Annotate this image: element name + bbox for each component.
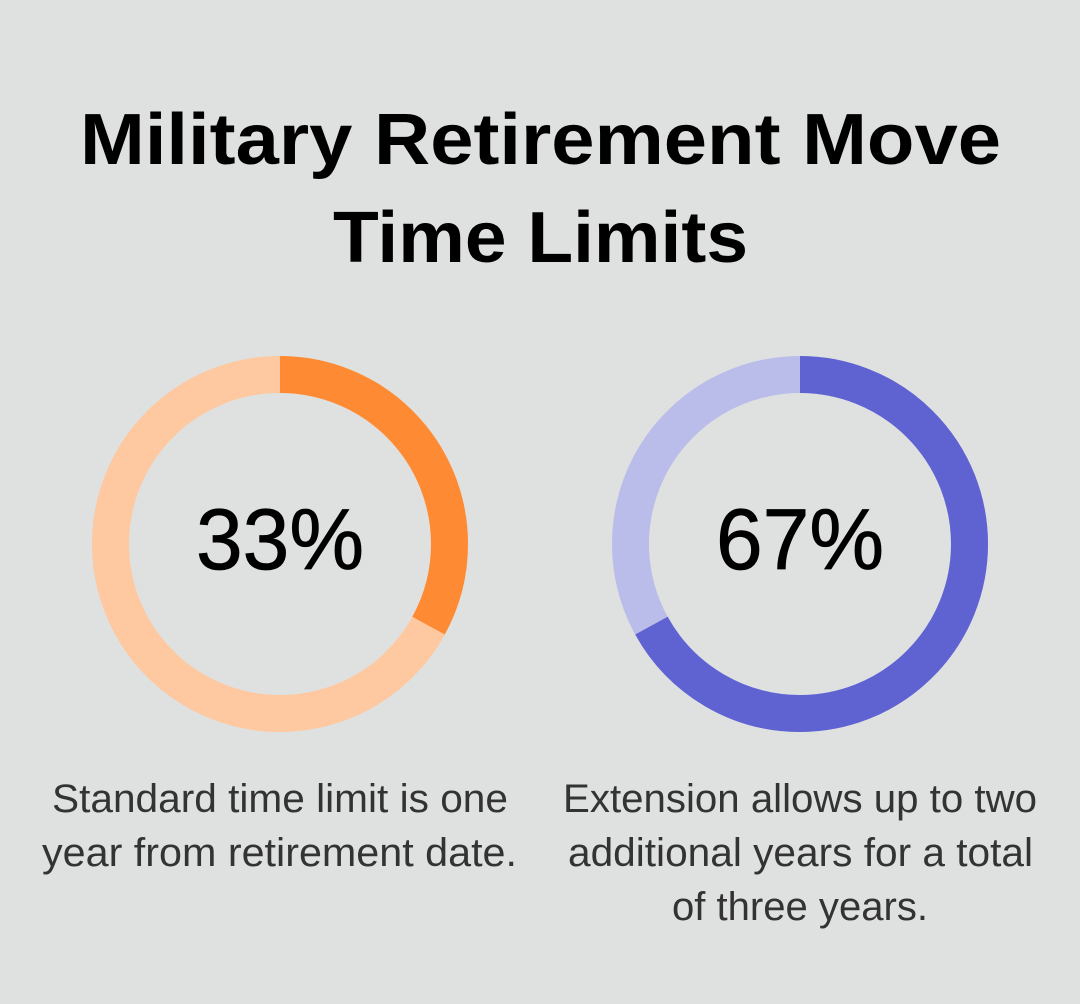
donut chart: 67%: [630, 374, 970, 714]
panel: standard time limit: [42, 374, 517, 875]
description: standard time limit: Standard time limit is one: [52, 777, 508, 821]
description: standard time limit: year from retirement date.: [42, 831, 517, 875]
description: extension: Extension allows up to two: [563, 777, 1037, 821]
description: extension: of three years.: [672, 885, 928, 929]
donut chart: 33%: [110, 374, 450, 714]
description: standard time limit: [42, 777, 517, 875]
title: Military Retirement Move: [80, 100, 1001, 180]
title: [80, 100, 1001, 278]
description: extension: additional years for a total: [568, 831, 1033, 875]
panel: extension: [563, 374, 1037, 929]
stat: 67%: 67%: [716, 492, 884, 588]
description: extension: [563, 777, 1037, 929]
title: Time Limits: [333, 198, 748, 278]
stat: 33%: 33%: [196, 492, 364, 588]
